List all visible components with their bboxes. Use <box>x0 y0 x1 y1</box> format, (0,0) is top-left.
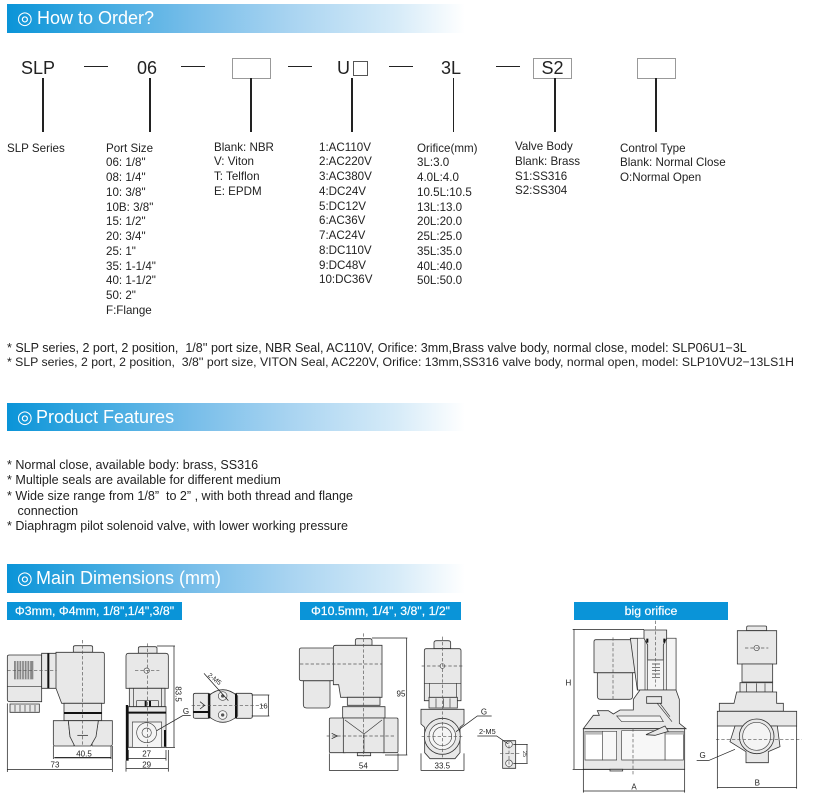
heading: Main Dimensions: Main Dimensions (mm) <box>36 568 221 588</box>
side view: G <box>183 707 189 716</box>
side view: 33.5 <box>435 762 451 771</box>
connector line: orifice <box>453 78 454 132</box>
connector line: port size <box>149 78 151 132</box>
code dash 5 <box>496 66 520 67</box>
front view: 40.5 <box>76 749 92 758</box>
code: 06: 06 <box>137 58 157 78</box>
code: 3L: 3L <box>441 58 461 78</box>
side view <box>421 637 492 771</box>
section view: H <box>565 678 571 687</box>
end view <box>697 626 802 789</box>
code dash 1 <box>84 66 108 67</box>
text: port size options: Port Size 06: 1/8" 08: 1/4" 10: 3/8" 10B: 3/8" 15: 1/2" 20: 3/4" 25: 1" 35: 1-1/4" 40: 1-1/2" 50: 2" F:Flange <box>106 142 156 317</box>
text: valve body options: Valve Body Blank: Brass S1:SS316 S2:SS304 <box>515 140 580 197</box>
heading: Product Features: Product Features <box>36 407 174 427</box>
side view: 27 <box>142 750 152 759</box>
section view <box>565 621 686 793</box>
front view <box>299 633 407 771</box>
drawing: 10.5mm orifice valve <box>299 633 528 771</box>
heading: How to Order: ◎ <box>17 8 33 29</box>
drawing: small orifice valve <box>7 640 269 772</box>
code dash 3 <box>288 66 312 67</box>
end view: G <box>700 751 706 760</box>
top view: 2-M5 <box>206 672 223 687</box>
code box: S2 <box>533 58 572 79</box>
code box: control type <box>637 58 676 79</box>
flange view: 25 <box>521 751 527 757</box>
side view <box>126 643 191 772</box>
heading: Product Features <box>7 403 465 431</box>
connector line: seal <box>250 78 252 132</box>
front view: 54 <box>359 762 368 771</box>
text: seal options: Blank: NBR V: Viton T: Telflon E: EPDM <box>214 140 274 198</box>
code: U with voltage box: U <box>337 58 350 78</box>
code: SLP: SLP <box>21 58 55 78</box>
end view: B <box>755 778 760 787</box>
heading: How to Order: How to Order? <box>37 8 154 28</box>
connector line: valve body <box>554 78 556 132</box>
text: model examples: * SLP series, 2 port, 2 position, 1/8'' port size, NBR Seal, AC110V, Orifice: 3mm,Brass valve body, normal close, model: SLP06U1−3L * SLP series, 2 port, 2 position, 3/8'' port size, VITON Seal, AC220V, Orifice: 13mm,SS316 valve body, normal open, model: SLP10VU2−13LS1H <box>7 341 794 368</box>
text: voltage options: 1:AC110V 2:AC220V 3:AC380V 4:DC24V 5:DC12V 6:AC36V 7:AC24V 8:DC110V 9:DC48V 10:DC36V <box>319 140 372 286</box>
connector line: series <box>42 78 44 132</box>
section view: A <box>631 782 637 791</box>
flange view: 2-M5 <box>479 727 496 736</box>
side view: G <box>481 708 487 717</box>
heading: Product Features: ◎ <box>17 407 33 428</box>
code dash 2 <box>181 66 205 67</box>
tab: 10.5 orifice: Φ10.5mm, 1/4", 3/8", 1/2" <box>311 604 450 618</box>
code dash 4 <box>389 66 413 67</box>
connector line: voltage <box>351 78 353 132</box>
tab: 10.5 orifice <box>300 602 461 620</box>
front view: 73 <box>51 760 60 769</box>
text: product features: * Normal close, available body: brass, SS316 * Multiple seals are available for different medium * Wide size range from 1/8” to 2” , with both thread and flange connection * Diaphragm pilot solenoid valve, with lower working pressure <box>7 458 353 533</box>
front view <box>7 640 112 772</box>
code: U with voltage box <box>337 58 368 78</box>
tab: big orifice: big orifice <box>625 604 677 618</box>
heading: How to Order <box>7 4 465 33</box>
side view: 29 <box>142 760 152 769</box>
code box: S2: S2 <box>541 58 564 78</box>
tab: small orifice: Φ3mm, Φ4mm, 1/8",1/4",3/8" <box>15 604 174 618</box>
front view: 95 <box>397 689 406 698</box>
text: series: SLP Series <box>7 142 65 154</box>
top view <box>192 672 269 722</box>
top view: 16 <box>259 701 268 710</box>
text: control type options: Control Type Blank: Normal Close O:Normal Open <box>620 142 726 184</box>
code box: seal <box>232 58 271 79</box>
heading: Main Dimensions: ◎ <box>17 568 33 589</box>
flange view <box>477 727 528 768</box>
connector line: control type <box>655 78 657 132</box>
heading: Main Dimensions <box>7 564 465 593</box>
side view: 83.5 <box>173 686 182 702</box>
drawing: big orifice valve <box>565 621 802 793</box>
text: orifice options: Orifice(mm) 3L:3.0 4.0L:4.0 10.5L:10.5 13L:13.0 20L:20.0 25L:25.0 35L:35.0 40L:40.0 50L:50.0 <box>417 142 478 287</box>
tab: big orifice <box>574 602 728 620</box>
